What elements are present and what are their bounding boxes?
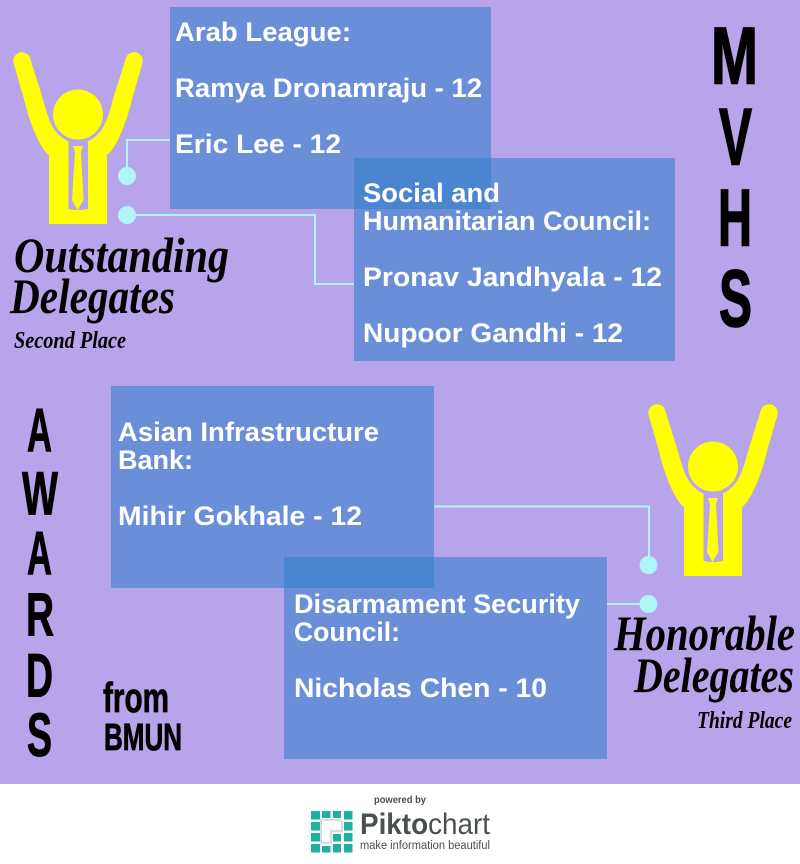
connector: Arab League to dot <box>118 140 170 185</box>
heading: Outstanding Delegates <box>9 227 229 324</box>
text: Nupoor Gandhi: Nupoor Gandhi - 12 <box>363 318 623 348</box>
panel: Disarmament Security Council <box>284 557 607 759</box>
panel: Arab League <box>170 7 491 209</box>
text: Social and Humanitarian Council heading: Social and <box>363 178 500 208</box>
text: Ramya Dronamraju: Ramya Dronamraju - 12 <box>175 73 482 103</box>
text: Social and Humanitarian Council heading <box>363 178 651 236</box>
text: tagline: make information beautiful <box>360 840 490 852</box>
icon: honorable delegate figure <box>648 404 778 576</box>
heading: AWARDS vertical title <box>22 396 58 769</box>
text: Arab League heading: Arab League: <box>175 17 351 47</box>
heading: MVHS vertical title: H <box>718 174 752 264</box>
heading: AWARDS vertical title: A <box>27 520 52 588</box>
text: Asian Infrastructure Bank heading: Bank: <box>118 445 193 475</box>
heading: MVHS vertical title: M <box>711 12 758 102</box>
connector: Asian Infrastructure Bank to dot <box>434 506 658 574</box>
heading: AWARDS vertical title: S <box>27 701 52 769</box>
text: from BMUN: from <box>103 674 169 721</box>
icon: outstanding delegate figure <box>13 52 143 224</box>
panel: Social and Humanitarian Council <box>354 158 675 361</box>
heading: AWARDS vertical title: D <box>26 642 53 710</box>
text: Nicholas Chen: Nicholas Chen - 10 <box>294 673 547 703</box>
heading: AWARDS vertical title: W <box>22 460 58 528</box>
text: Disarmament Security Council heading: Disarmament Security <box>294 589 580 619</box>
text: Asian Infrastructure Bank heading <box>118 417 379 475</box>
heading: MVHS vertical title: S <box>719 254 752 344</box>
text: Social and Humanitarian Council heading: Humanitarian Council: <box>363 206 651 236</box>
connector: Social Council to dot <box>118 206 354 284</box>
panel: Asian Infrastructure Bank <box>111 386 434 588</box>
text: Second Place: Second Place <box>14 328 126 354</box>
heading: AWARDS vertical title: A <box>27 396 52 464</box>
heading: MVHS vertical title: V <box>719 92 752 182</box>
heading: Honorable Delegates <box>613 605 795 703</box>
text: Disarmament Security Council heading: Council: <box>294 617 400 647</box>
text: Asian Infrastructure Bank heading: Asian Infrastructure <box>118 417 379 447</box>
heading: AWARDS vertical title: R <box>26 580 54 648</box>
heading: MVHS vertical title <box>711 12 758 344</box>
heading: Outstanding Delegates: Delegates <box>9 268 175 324</box>
connector: Disarmament Council to dot <box>607 595 658 613</box>
text: Pronav Jandhyala: Pronav Jandhyala - 12 <box>363 262 662 292</box>
text: Mihir Gokhale: Mihir Gokhale - 12 <box>118 501 362 531</box>
text: Disarmament Security Council heading <box>294 589 580 647</box>
text: from BMUN <box>103 674 182 759</box>
text: Eric Lee: Eric Lee - 12 <box>175 129 341 159</box>
footer: Piktochart branding <box>311 795 491 852</box>
heading: Outstanding Delegates: Outstanding <box>14 227 229 283</box>
icon: Piktochart logo <box>311 811 352 852</box>
text: powered by: powered by <box>374 795 426 806</box>
text: from BMUN: BMUN <box>104 717 182 759</box>
text: Piktochart wordmark: Piktochart <box>360 808 491 841</box>
